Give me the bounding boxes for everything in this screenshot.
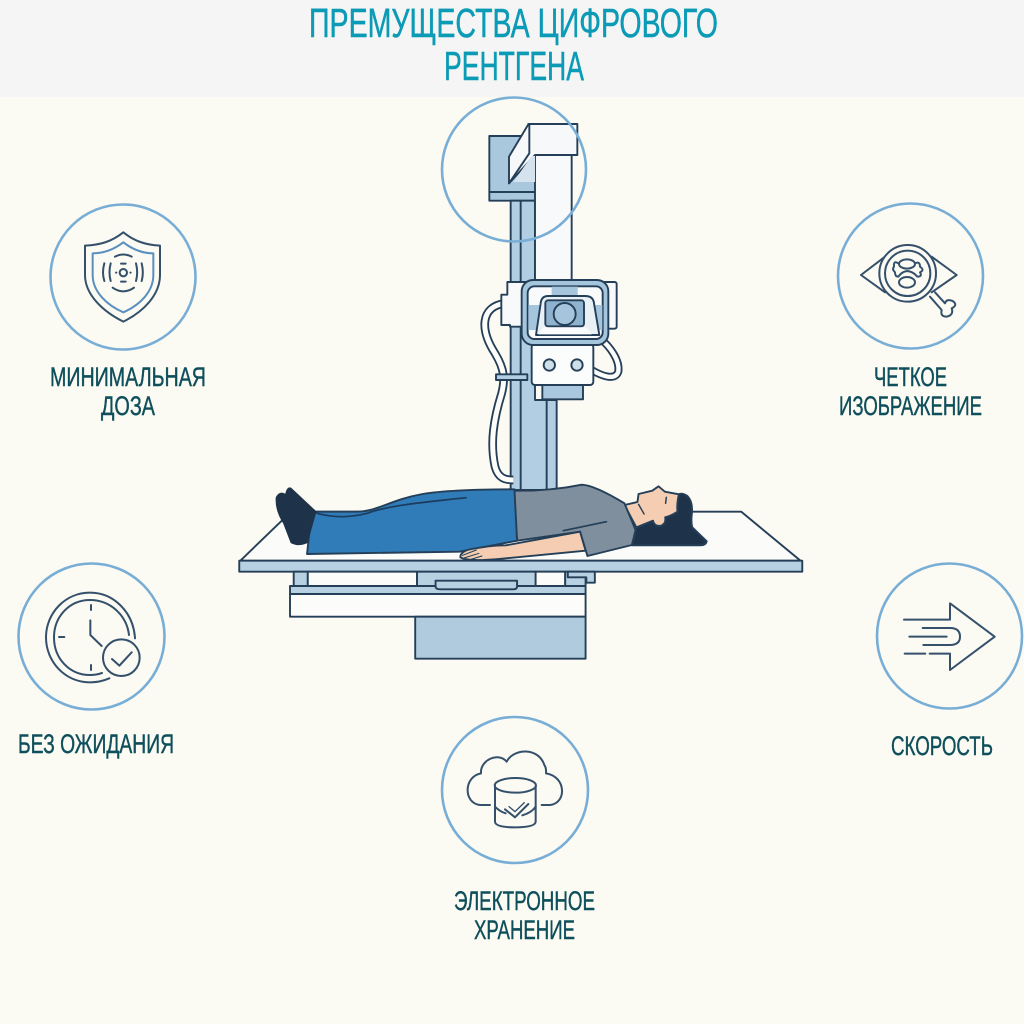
table edge: [239, 561, 802, 572]
right hose: [592, 338, 619, 377]
illustration: table: [239, 485, 802, 659]
fingers: [463, 550, 482, 560]
column: [511, 201, 557, 490]
label: ХРАНЕНИЕ: [474, 915, 575, 945]
circle: [18, 564, 164, 710]
white telescopic arm: [509, 124, 577, 282]
blue base: [415, 617, 586, 659]
control box: [532, 344, 593, 385]
lower bracket: [542, 383, 583, 399]
table supports: [294, 572, 595, 587]
hair and headrest: [632, 494, 707, 545]
left hose: [485, 303, 513, 480]
panel: electronic storage: [442, 717, 595, 945]
tabletop: [240, 512, 800, 561]
label: ЧЕТКОЕ: [874, 362, 947, 392]
label: БЕЗ ОЖИДАНИЯ: [18, 729, 174, 759]
neck and face: [624, 486, 679, 527]
title: [309, 0, 718, 89]
icon: cloud database: [468, 751, 562, 827]
circle: [50, 204, 196, 350]
icon: fast arrow: [904, 603, 995, 670]
arm and hand: [460, 532, 586, 560]
shirt crease: [563, 522, 606, 531]
top circle outline: [442, 98, 586, 242]
socks: [276, 488, 316, 545]
white base: [290, 594, 586, 617]
circle: [877, 564, 1022, 708]
label: МИНИМАЛЬНАЯ: [50, 362, 206, 392]
icon: shield: [85, 232, 160, 322]
panel: speed: [877, 564, 1022, 761]
circle: [838, 204, 983, 348]
title: ПРЕМУЩЕСТВА ЦИФРОВОГО: [309, 0, 718, 46]
label: ДОЗА: [101, 391, 155, 421]
panel: clear image: [838, 204, 983, 421]
pants crease: [317, 498, 466, 517]
drawer handle: [436, 581, 517, 589]
hose clamp: [496, 374, 527, 380]
icon: eye with magnifier and bone: [861, 245, 957, 317]
label: [50, 362, 206, 421]
drawer: [290, 586, 586, 594]
icon: clock with check: [46, 593, 140, 682]
panel: no waiting: [18, 564, 174, 759]
shirt: [513, 485, 636, 556]
back plate: [489, 136, 538, 201]
face details: [639, 497, 666, 514]
label: ЭЛЕКТРОННОЕ: [454, 886, 595, 916]
circle: [442, 717, 588, 863]
label: [839, 362, 982, 421]
header band: [0, 0, 1024, 97]
pants: [307, 489, 517, 554]
collimator head: [522, 280, 608, 345]
illustration: x-ray column and head: [485, 124, 619, 490]
patient: [276, 485, 707, 560]
title: РЕНТГЕНА: [444, 43, 584, 89]
mount blocks: [501, 282, 617, 329]
panel: minimal dose: [50, 204, 206, 421]
label: [454, 886, 595, 945]
